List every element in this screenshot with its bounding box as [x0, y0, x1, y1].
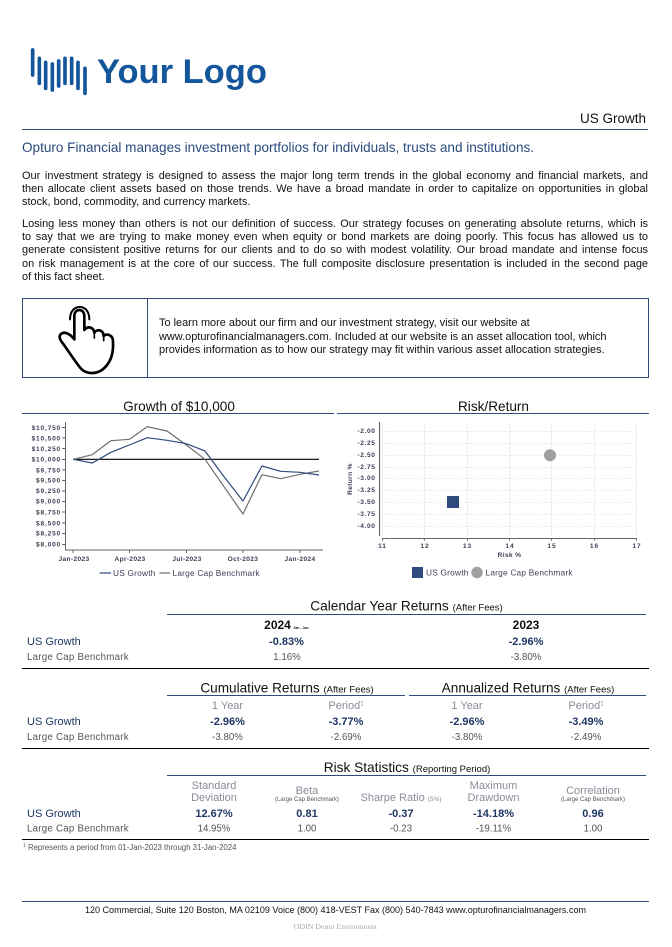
panel: growth of $10,000 chart: Jul-2023	[172, 556, 202, 563]
chart legend: US Growth	[113, 568, 156, 578]
table: risk statistics: Large Cap Benchmark	[27, 824, 129, 834]
callout text: www.opturofinancialmanagers.com. Included at our website is an asset allocation tool, which	[159, 330, 606, 342]
paragraph: definition of success: Losing less money than others is not our definition of success. Our strategy focuses on generating absolute returns, which is	[22, 218, 648, 230]
table: cumulative and annualized returns: -2.69%	[331, 732, 362, 743]
table: cumulative and annualized returns: -2.49%	[571, 732, 602, 743]
table: cumulative and annualized returns: US Growth	[27, 716, 81, 728]
paragraph: investment strategy: stock, bond, commodity, and currency markets.	[22, 196, 250, 208]
panel: growth of $10,000 chart: Oct-2023	[228, 556, 258, 563]
header rule	[22, 129, 648, 130]
panel: growth of $10,000 chart: $8,250	[36, 531, 61, 538]
table: calendar year returns: Jan - Jan	[293, 626, 309, 630]
table: cumulative and annualized returns: -3.77%	[329, 716, 364, 728]
paragraph: investment strategy	[22, 170, 648, 208]
chart legend: Large Cap Benchmark	[172, 568, 260, 578]
panel: risk/return chart: -2.00	[357, 428, 376, 435]
table: calendar year returns: 2024	[264, 618, 291, 632]
table: cumulative and annualized returns: 1	[360, 702, 364, 708]
table: calendar year returns: -2.96%	[509, 636, 544, 648]
table: risk statistics: Drawdown	[468, 792, 519, 804]
cumulative heading: Cumulative Returns (After Fees)	[200, 680, 374, 696]
table: risk statistics: 0.81	[296, 808, 318, 820]
panel: growth of $10,000 chart: $10,000	[32, 457, 61, 464]
table: risk statistics: 1.00	[298, 824, 317, 834]
table: calendar year returns: -0.83%	[269, 636, 304, 648]
panel: risk/return chart: -3.00	[357, 475, 376, 482]
callout text: provides information as to how our strategy may fit within various asset allocation strategies.	[159, 344, 605, 356]
paragraph: investment strategy: Our investment strategy is designed to assess the major long term trends in the global economy and financial markets, and	[22, 170, 648, 182]
panel: risk/return chart: 16	[590, 543, 599, 550]
table: cumulative and annualized returns: -2.96%	[210, 716, 245, 728]
paragraph: investment strategy: then allocate client assets based on those trends. We have a broad mandate in order to capitalize on opportunities in global	[22, 183, 648, 195]
table: cumulative and annualized returns: Period	[328, 700, 360, 712]
paragraph: definition of success: generate consistent positive returns for our clients and to do so with modest volatility. Our broad mandate and intense focus	[22, 244, 648, 256]
report title: US Growth	[580, 111, 646, 126]
paragraph: definition of success: on risk management is at the core of our success. The full composite disclosure presentation is included in the second page	[22, 258, 648, 270]
panel: growth of $10,000 chart: $10,250	[32, 446, 61, 453]
panel: risk/return chart: 17	[632, 543, 642, 550]
table heading: Risk Statistics (Reporting Period)	[324, 760, 490, 775]
paragraph: definition of success: to say that we are trying to make money even when equity or bond markets are doing poorly. This focus has allowed us to	[22, 231, 648, 243]
table: risk statistics: 0.96	[582, 808, 604, 820]
environment note: ODIN Demo Environment	[294, 922, 377, 931]
table: cumulative and annualized returns: 1 Year	[451, 700, 483, 712]
table: cumulative and annualized returns: Large Cap Benchmark	[27, 732, 129, 743]
table: cumulative and annualized returns: Period	[568, 700, 600, 712]
table: risk statistics: -14.18%	[473, 808, 514, 820]
panel: risk/return chart: -3.75	[357, 511, 376, 518]
chart legend	[100, 568, 260, 578]
table: risk statistics: Correlation	[566, 785, 620, 797]
headline: Opturo Financial manages investment portfolios for individuals, trusts and institutions.	[22, 140, 534, 155]
table heading: Calendar Year Returns (After Fees)	[310, 598, 503, 614]
table: risk statistics: -0.23	[390, 824, 412, 834]
panel: risk/return chart: 13	[463, 543, 472, 550]
panel: risk/return chart: -3.50	[357, 499, 376, 506]
table: calendar year returns: 1.16%	[273, 652, 301, 663]
table: risk statistics: Standard	[192, 780, 236, 792]
table: risk statistics: Deviation	[191, 792, 237, 804]
table: risk statistics: Maximum	[470, 780, 517, 792]
panel: risk/return chart: 11	[378, 543, 387, 550]
callout text	[159, 317, 606, 356]
panel: website callout	[22, 298, 649, 378]
US Growth marker	[447, 496, 459, 508]
table: cumulative and annualized returns: -3.49%	[569, 716, 604, 728]
table: risk statistics: (Large Cap Benchmark)	[275, 797, 339, 803]
logo	[30, 48, 267, 96]
table: calendar year returns: 2023	[513, 618, 540, 632]
table: risk statistics: (Large Cap Benchmark)	[561, 797, 625, 803]
logo: Your Logo	[97, 53, 267, 91]
table: risk statistics: US Growth	[27, 808, 81, 820]
chart legend	[412, 567, 573, 578]
table: risk statistics: 14.95%	[198, 824, 231, 834]
panel: risk/return chart: Return %	[347, 463, 354, 495]
footer rule	[22, 901, 649, 902]
panel: growth of $10,000 chart: $9,750	[36, 468, 61, 474]
table: cumulative and annualized returns: 1 Year	[212, 700, 243, 712]
axis labels: Risk %	[498, 552, 521, 559]
US Growth line	[73, 438, 319, 501]
chart heading: Growth of $10,000	[123, 399, 235, 414]
panel: risk/return chart: -3.25	[357, 487, 376, 494]
panel: growth of $10,000 chart: $9,500	[36, 478, 61, 484]
table: risk statistics: Beta	[296, 785, 319, 797]
panel: risk/return chart: -4.00	[357, 523, 376, 530]
benchmark marker	[544, 449, 556, 461]
table: cumulative and annualized returns: -3.80%	[212, 732, 243, 743]
footnote: 1 Represents a period from 01-Jan-2023 through 31-Jan-2024	[23, 843, 236, 852]
panel: risk/return chart: 12	[420, 543, 430, 550]
panel: growth of $10,000 chart: $8,000	[36, 542, 61, 549]
table: risk statistics: 1.00	[584, 824, 603, 834]
table: calendar year returns: US Growth	[27, 636, 81, 648]
table: cumulative and annualized returns: -2.96%	[450, 716, 485, 728]
panel: growth of $10,000 chart: Jan-2023	[58, 556, 90, 563]
panel: growth of $10,000 chart: Apr-2023	[114, 556, 146, 563]
table: calendar year returns: Large Cap Benchmark	[27, 652, 129, 663]
callout text: To learn more about our firm and our investment strategy, visit our website at	[159, 317, 530, 329]
table: cumulative and annualized returns: 1	[600, 702, 604, 708]
paragraph: definition of success	[22, 218, 648, 283]
panel: growth of $10,000 chart: Jan-2024	[284, 556, 316, 563]
table: calendar year returns: -3.80%	[511, 652, 542, 663]
panel: growth of $10,000 chart: $10,750	[32, 425, 61, 432]
paragraph: definition of success: of this fact sheet.	[22, 271, 105, 283]
table: risk statistics: -0.37	[388, 808, 414, 820]
chart heading: Risk/Return	[458, 399, 529, 414]
table: risk statistics: Sharpe Ratio (5%)	[360, 792, 442, 804]
panel: risk/return chart: -2.50	[357, 452, 376, 459]
panel: risk/return chart: -2.25	[357, 440, 376, 447]
panel: risk/return chart: -2.75	[357, 464, 376, 471]
table: risk statistics: -19.11%	[476, 824, 512, 834]
panel: growth of $10,000 chart: $10,500	[32, 435, 61, 442]
benchmark line	[73, 427, 319, 514]
divider and icon: pointing hand	[23, 299, 148, 377]
chart legend: Large Cap Benchmark	[486, 568, 573, 578]
panel: growth of $10,000 chart: $9,000	[36, 499, 61, 506]
table: risk statistics: 12.67%	[195, 808, 233, 820]
panel: growth of $10,000 chart: $8,500	[36, 520, 61, 527]
panel: growth of $10,000 chart: $8,750	[36, 509, 61, 516]
chart legend: US Growth	[426, 568, 469, 578]
table: cumulative and annualized returns: -3.80%	[452, 732, 483, 743]
panel: growth of $10,000 chart: $9,250	[36, 488, 61, 495]
panel: risk/return chart: 15	[547, 543, 557, 550]
footer contact: 120 Commercial, Suite 120 Boston, MA 02109 Voice (800) 418-VEST Fax (800) 540-7843 www.opturofinancialmanagers.com	[85, 905, 586, 915]
panel: risk/return chart: 14	[505, 543, 515, 550]
annualized heading: Annualized Returns (After Fees)	[442, 680, 614, 696]
